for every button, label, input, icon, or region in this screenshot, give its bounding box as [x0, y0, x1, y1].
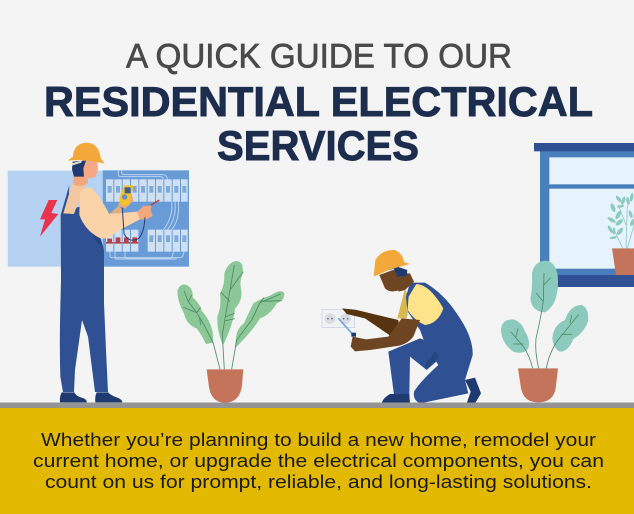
title — [44, 38, 593, 169]
title line: services: SERVICES — [217, 122, 419, 169]
skin back — [63, 182, 85, 214]
far arm — [103, 206, 123, 224]
bib fold — [91, 230, 104, 249]
back arm — [342, 308, 400, 337]
banner line 3: count on us for prompt, reliable, and long-lasting solutions. — [45, 472, 592, 492]
right shoe — [95, 392, 122, 402]
wall socket — [322, 309, 355, 328]
middle leaf — [217, 261, 243, 345]
right leaf — [552, 305, 588, 352]
near arm — [79, 187, 140, 239]
multimeter — [119, 185, 133, 205]
hair — [387, 267, 407, 277]
left leaf — [177, 284, 213, 344]
worker with multimeter — [60, 143, 159, 392]
kneeling worker — [338, 250, 481, 404]
socket plate — [322, 309, 355, 328]
head — [379, 268, 407, 291]
hard hat — [68, 143, 105, 164]
overalls body — [407, 283, 473, 403]
back shoe — [465, 378, 481, 403]
top leaf — [530, 261, 558, 312]
banner text — [33, 430, 604, 492]
breaker board — [103, 170, 189, 267]
red breakers — [106, 237, 138, 244]
floor plant with teal leaves — [501, 261, 588, 402]
hair — [72, 161, 86, 177]
knee shadow — [425, 352, 439, 368]
hard hat — [374, 250, 410, 277]
worker feet — [60, 392, 122, 402]
front leg — [388, 338, 440, 395]
floor plant with green leaves — [177, 261, 284, 403]
left shoe — [60, 392, 87, 402]
flower pot — [207, 369, 243, 403]
hand with meter — [118, 193, 133, 209]
window top rail — [534, 143, 634, 151]
window — [534, 143, 634, 287]
screwdriver — [338, 318, 353, 335]
title line: a quick guide to our: A QUICK GUIDE TO OUR — [126, 38, 512, 76]
floor strip — [0, 402, 634, 408]
electrical panel scene — [8, 170, 189, 267]
strap — [406, 283, 417, 312]
window panes — [549, 157, 634, 184]
hand with probe — [137, 205, 153, 219]
stems and veins — [511, 273, 579, 368]
light wall panel — [8, 171, 103, 267]
banner line 1: Whether you’re planning to build a new home, remodel your — [41, 430, 596, 450]
right leaf — [235, 291, 284, 348]
yellow shirt — [407, 284, 443, 325]
front shoe — [382, 394, 410, 404]
yellow banner — [0, 408, 634, 514]
icon: lightning bolt — [40, 200, 58, 237]
head — [78, 160, 98, 179]
window plant — [607, 193, 634, 275]
neck — [397, 273, 414, 292]
flower pot — [518, 368, 558, 402]
window sill — [547, 275, 634, 287]
title line: residential electrical: RESIDENTIAL ELECTRICAL — [44, 78, 593, 125]
neck — [73, 171, 88, 186]
window plant pot — [612, 248, 634, 275]
left leaf — [501, 319, 529, 353]
banner line 2: current home, or upgrade the electrical components, you can — [33, 451, 604, 471]
yellow shirt back — [397, 288, 410, 318]
leaf veins — [183, 265, 282, 369]
window frame — [540, 151, 634, 275]
front arm — [351, 318, 420, 351]
overalls and legs — [60, 185, 108, 392]
